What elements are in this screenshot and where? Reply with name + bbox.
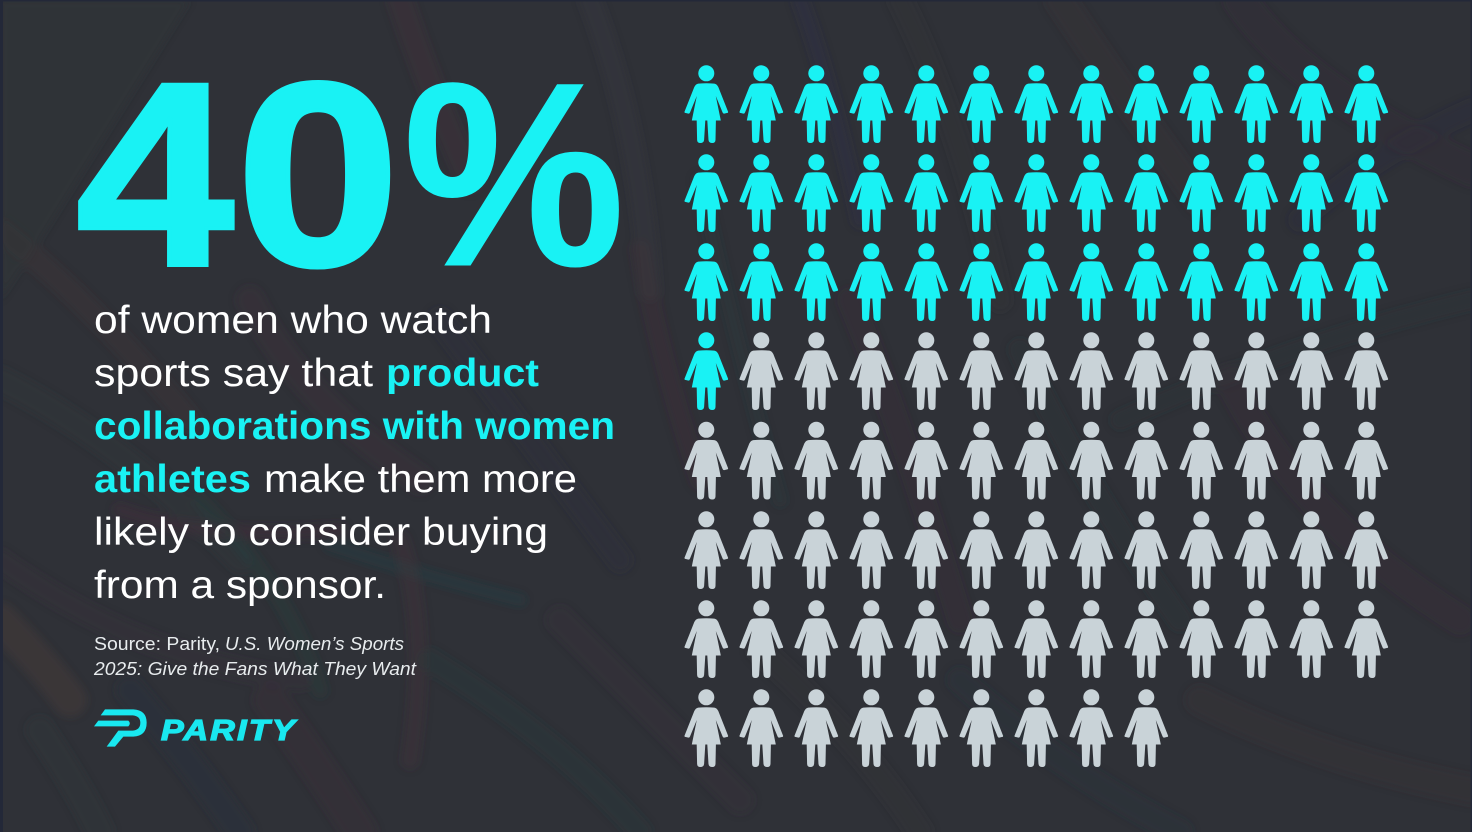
body text: of women who watch [94, 299, 492, 342]
pictogram: 100 women, 40 highlighted [684, 65, 1388, 767]
body text: athletes [94, 458, 251, 501]
body text: likely to consider buying [94, 511, 548, 554]
body text: make them more [264, 458, 577, 501]
row 6 [684, 511, 1388, 589]
row 7 [684, 600, 1388, 678]
row 5 [684, 422, 1388, 500]
headline: 40%: 0 [236, 28, 400, 321]
source note: U.S. Women’s Sports [225, 633, 404, 654]
source note: 2025: Give the Fans What They Want [93, 658, 417, 679]
headline: 40% [76, 28, 625, 321]
body text: collaborations with women [94, 405, 615, 448]
row 1 [684, 65, 1388, 143]
headline: 40%: % [403, 28, 625, 321]
row 2 [684, 154, 1388, 232]
body text: sports say that [94, 352, 373, 395]
row 8 [684, 689, 1168, 767]
row 4 [684, 332, 1388, 410]
row 3 [684, 243, 1388, 321]
body text: product [386, 352, 539, 395]
logo: Parity: PARITY [161, 715, 298, 747]
body text [94, 299, 615, 607]
headline: 40%: 4 [76, 28, 236, 321]
source note: Source: Parity, [94, 633, 220, 654]
logo: Parity [94, 709, 298, 747]
source note [93, 633, 417, 679]
body text: from a sponsor. [94, 564, 386, 607]
